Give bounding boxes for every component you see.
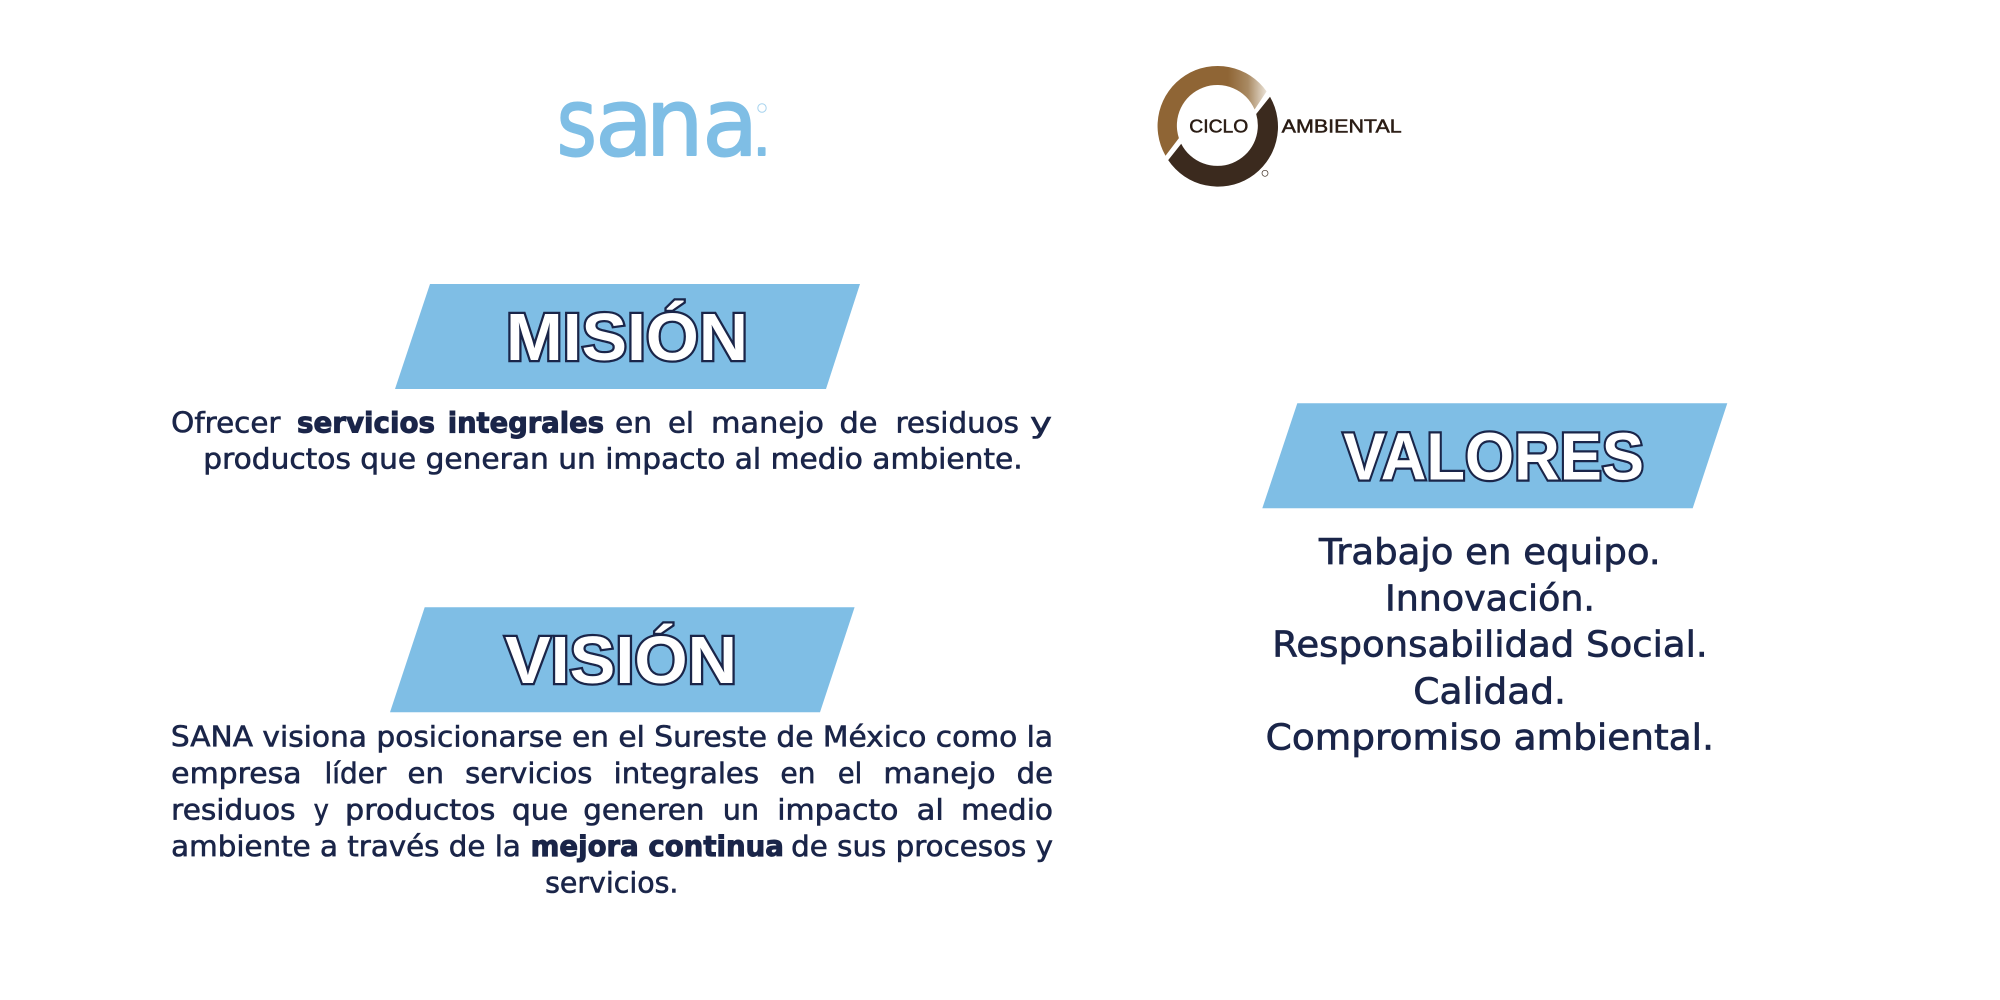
vision text: al — [917, 793, 944, 826]
vision text: empresa — [171, 757, 302, 790]
valores list: Calidad. — [1413, 671, 1566, 712]
mision text: integrales — [448, 407, 604, 440]
valores list: Compromiso ambiental. — [1266, 717, 1714, 758]
vision text: y — [314, 793, 329, 826]
vision text: mejora continua — [531, 830, 784, 863]
vision text: servicios. — [545, 866, 678, 899]
mision text: manejo — [711, 407, 824, 440]
vision text: SANA visiona posicionarse en el Sureste de México como la — [171, 721, 1053, 754]
logo: sana: . — [753, 104, 770, 168]
vision banner — [390, 607, 855, 712]
mision text: de — [840, 407, 878, 440]
mision heading: MISIÓN — [506, 300, 748, 375]
mision text: en — [615, 407, 652, 440]
vision text: líder — [325, 757, 387, 790]
valores heading: VALORES — [1343, 419, 1644, 494]
logo: sana: s — [557, 69, 597, 178]
vision text: residuos — [171, 793, 295, 826]
logo: sana: a — [595, 69, 653, 178]
valores list — [1266, 532, 1714, 758]
vision heading: VISIÓN — [505, 623, 737, 698]
valores list: Trabajo en equipo. — [1318, 532, 1661, 573]
logo: sana — [557, 69, 770, 178]
vision text: el — [838, 757, 862, 790]
vision text: servicios — [465, 757, 592, 790]
vision text: ambiente a través de la — [171, 830, 521, 863]
logo: sana: a — [702, 69, 758, 178]
vision text: manejo — [883, 757, 995, 790]
mision text: y — [1030, 407, 1052, 440]
mision text: el — [668, 407, 694, 440]
panel: mision — [171, 284, 1052, 476]
mision text: productos que generan un impacto al medio ambiente. — [203, 442, 1023, 476]
mision text: Ofrecer — [171, 407, 281, 440]
vision text: en — [408, 757, 444, 790]
vision text: impacto — [777, 793, 898, 826]
vision text: que — [512, 793, 568, 826]
vision text: de — [1017, 757, 1053, 790]
panel: valores — [1262, 403, 1727, 758]
logo: ciclo ambiental — [1158, 66, 1402, 187]
mision banner — [395, 284, 860, 389]
vision text: productos — [345, 793, 495, 826]
vision text: integrales — [614, 757, 759, 790]
vision text: un — [723, 793, 759, 826]
valores list: Innovación. — [1385, 579, 1595, 620]
mision text: residuos — [896, 407, 1019, 440]
logo: ciclo ambiental: AMBIENTAL — [1282, 116, 1402, 137]
valores banner — [1262, 403, 1727, 508]
vision text: medio — [961, 793, 1053, 826]
vision text: generen — [583, 793, 704, 826]
panel: vision — [171, 607, 1053, 899]
mision text: servicios — [297, 407, 435, 440]
logo: sana: n — [646, 69, 703, 178]
valores list: Responsabilidad Social. — [1272, 625, 1708, 666]
vision text — [171, 721, 1053, 899]
mision text — [171, 407, 1052, 476]
logo: ciclo ambiental: CICLO — [1189, 116, 1248, 137]
vision text: en — [780, 757, 815, 790]
vision text: de sus procesos y — [791, 830, 1053, 863]
